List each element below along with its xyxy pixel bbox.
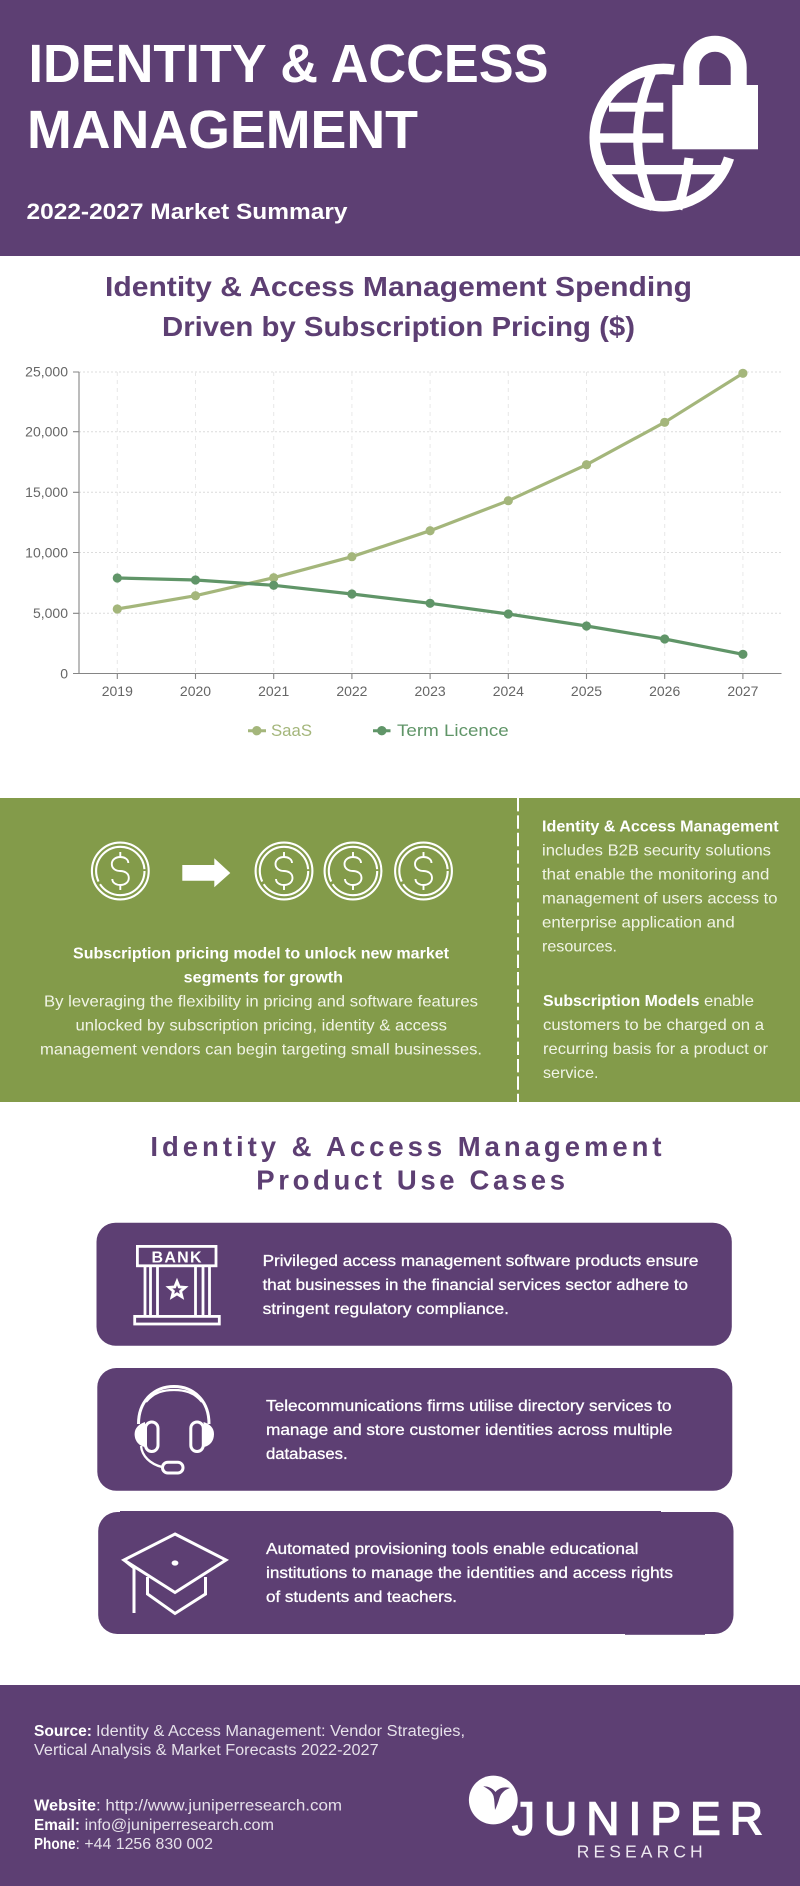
icon: graduation cap [124, 1534, 226, 1614]
source note: Identity & Access Management: Vendor Strategies, [96, 1723, 465, 1740]
chart heading [105, 271, 692, 342]
legend [248, 721, 509, 740]
x axis labels: 2027 [727, 683, 759, 699]
contact details [34, 1798, 342, 1853]
panel: subscription pricing band [0, 798, 800, 1102]
logo: Juniper Research: RESEARCH [577, 1842, 703, 1862]
y axis labels: 25,000 [25, 364, 68, 380]
icon: bank [135, 1246, 219, 1324]
text: subscription models definition: Subscription Models [543, 993, 700, 1010]
y axis labels: 0 [60, 666, 68, 682]
logo: Juniper Research: JUNIPER [512, 1792, 763, 1844]
title: MANAGEMENT [27, 100, 418, 160]
line chart: spending by pricing model [25, 364, 782, 740]
use cases heading [150, 1131, 662, 1196]
x axis labels: 2023 [415, 683, 446, 699]
text: subscription models definition: recurring basis for a product or [543, 1041, 769, 1058]
text: subscription models definition: service. [543, 1065, 598, 1082]
y axis labels: 15,000 [25, 484, 68, 500]
text: identity and access management definition: that enable the monitoring and [542, 867, 769, 884]
card text: of students and teachers. [266, 1589, 457, 1606]
contact details: Email: [34, 1817, 80, 1834]
title: IDENTITY & ACCESS [28, 34, 548, 94]
x axis labels: 2022 [336, 683, 368, 699]
card text [266, 1398, 673, 1463]
text: subscription pricing model: By leveraging the flexibility in pricing and software features [44, 994, 478, 1011]
card text [266, 1541, 673, 1606]
panel: use case education [98, 1511, 733, 1635]
x axis labels: 2024 [493, 683, 524, 699]
text: subscription pricing model [40, 945, 482, 1059]
text: subscription pricing model: management vendors can begin targeting small businesses. [40, 1042, 482, 1059]
text: identity and access management definition: resources. [542, 939, 617, 956]
y axis labels: 5,000 [33, 605, 68, 621]
source note: Vertical Analysis & Market Forecasts 2022-2027 [34, 1742, 379, 1759]
x axis labels: 2026 [649, 683, 680, 699]
text: subscription pricing model: unlocked by subscription pricing, identity & access [76, 1018, 447, 1035]
text: identity and access management definition [542, 819, 779, 956]
card text: institutions to manage the identities and access rights [266, 1565, 673, 1582]
y axis labels: 10,000 [25, 544, 68, 560]
panel: use case telecommunications [97, 1368, 732, 1491]
card text: stringent regulatory compliance. [263, 1301, 509, 1318]
card text: Automated provisioning tools enable educational [266, 1541, 638, 1558]
contact details: info@juniperresearch.com [85, 1817, 274, 1834]
logo: Juniper Research [469, 1776, 763, 1862]
legend: SaaS [271, 721, 312, 740]
text: subscription models definition: customers to be charged on a [543, 1017, 764, 1034]
source note: Source: [34, 1723, 92, 1740]
arrow [182, 858, 230, 887]
card text: manage and store customer identities across multiple [266, 1422, 673, 1439]
x axis labels: 2019 [102, 683, 133, 699]
icon: bank: BANK [152, 1250, 202, 1266]
y axis labels: 20,000 [25, 424, 68, 440]
text: identity and access management definition: management of users access to [542, 891, 778, 908]
chart heading: Driven by Subscription Pricing ($) [162, 311, 635, 342]
y axis labels [25, 364, 68, 682]
source note [34, 1723, 465, 1759]
icon: globe with padlock [595, 44, 758, 209]
icon: three coins [256, 843, 452, 899]
contact details: : http://www.juniperresearch.com [96, 1798, 342, 1815]
x axis labels: 2025 [571, 683, 602, 699]
card text: databases. [266, 1446, 348, 1463]
use cases heading: Identity & Access Management [150, 1131, 662, 1162]
text: identity and access management definition: Identity & Access Management [542, 819, 779, 836]
panel: use case banking [96, 1223, 732, 1346]
x axis labels: 2021 [258, 683, 289, 699]
text: subscription models definition [543, 993, 769, 1082]
subtitle: 2022-2027 Market Summary [26, 199, 348, 224]
panel: header [0, 0, 800, 256]
card text: Telecommunications firms utilise directory services to [266, 1398, 672, 1415]
icon: one coin [92, 843, 149, 899]
text: identity and access management definition: enterprise application and [542, 915, 735, 932]
card text: Privileged access management software products ensure [263, 1253, 699, 1270]
text: subscription pricing model: Subscription pricing model to unlock new market [73, 945, 450, 962]
use cases heading: Product Use Cases [256, 1164, 565, 1196]
card text: that businesses in the financial services sector adhere to [263, 1277, 688, 1294]
x axis labels [102, 683, 759, 699]
chart heading: Identity & Access Management Spending [105, 271, 692, 302]
icon: headset [135, 1386, 214, 1473]
contact details: Phone [34, 1836, 76, 1853]
legend: Term Licence [397, 721, 509, 740]
text: identity and access management definition: includes B2B security solutions [542, 843, 771, 860]
title [27, 34, 548, 160]
card text [263, 1253, 699, 1318]
series: SaaS [113, 369, 748, 614]
text: subscription models definition: enable [704, 993, 754, 1010]
panel: footer [0, 1685, 800, 1886]
x axis labels: 2020 [180, 683, 211, 699]
text: subscription pricing model: segments for growth [184, 969, 343, 986]
contact details: Website [34, 1798, 96, 1815]
contact details: : +44 1256 830 002 [76, 1836, 213, 1853]
series: Term Licence [113, 573, 748, 659]
